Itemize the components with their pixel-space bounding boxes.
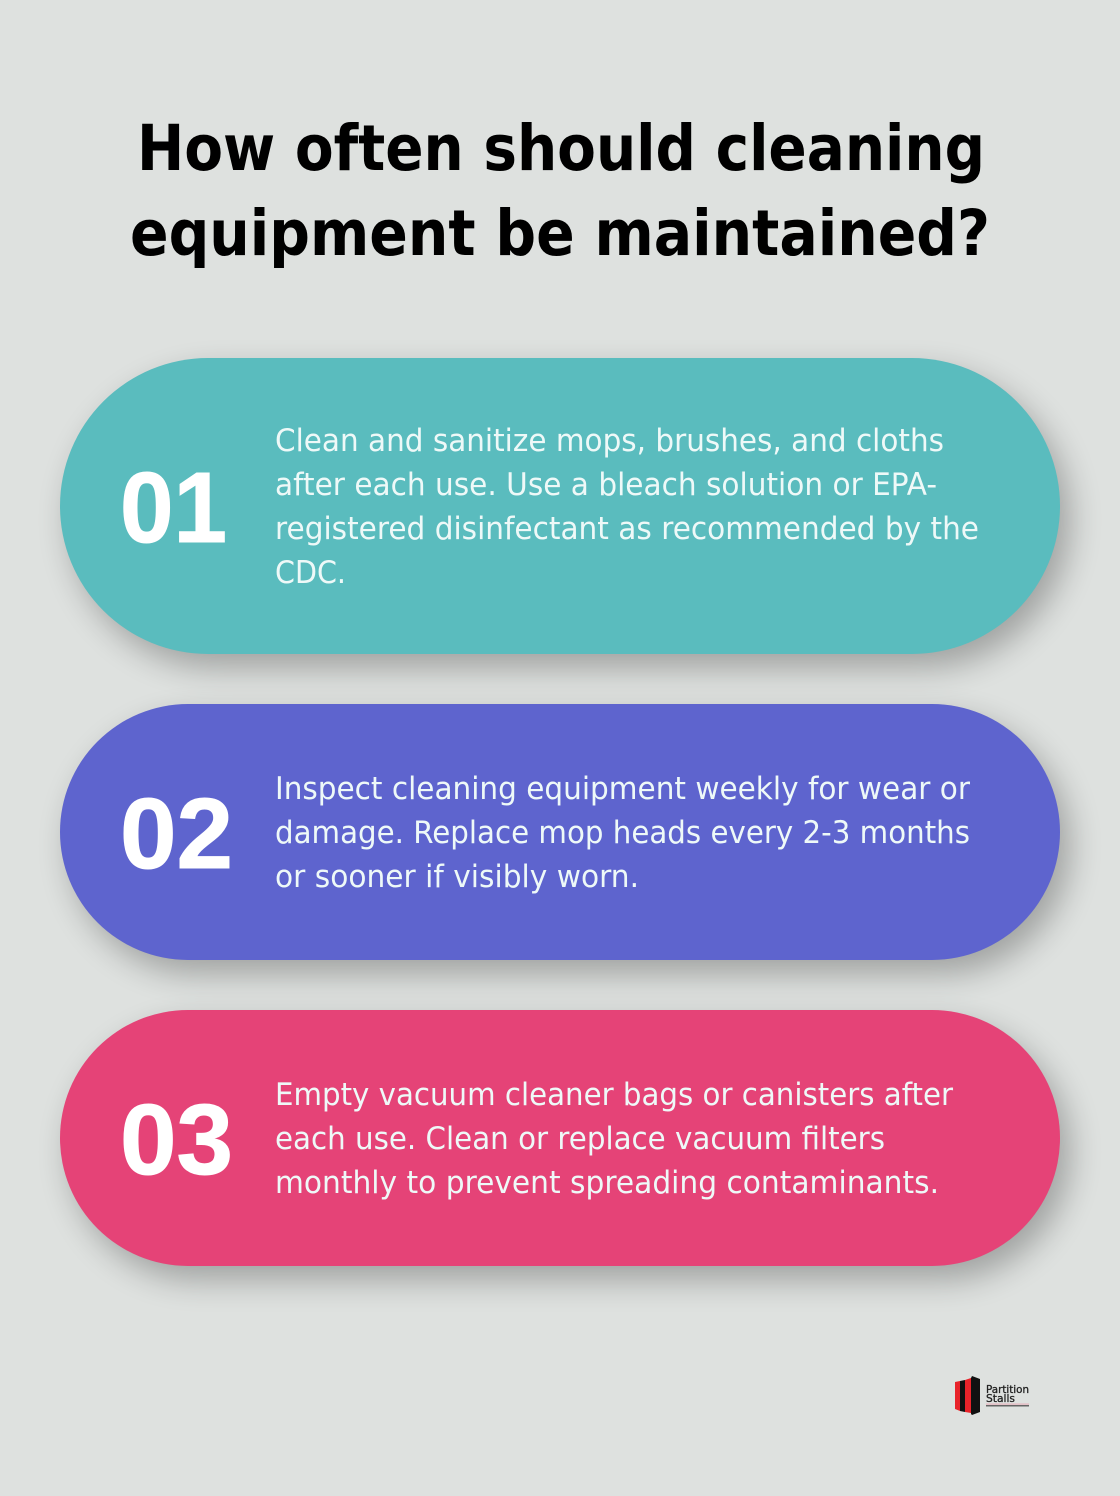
text: step 03 description: [275, 1077, 953, 1201]
text: step 03 description: Empty vacuum cleaner bags or canisters after: [275, 1077, 953, 1113]
text: step 01 description: CDC.: [275, 555, 346, 591]
number 02: 02: [120, 778, 233, 890]
panel: step 01: [60, 358, 1070, 668]
number 03: 03: [120, 1084, 233, 1196]
text: step 03 description: each use. Clean or replace vacuum filters: [275, 1121, 885, 1157]
logo wordmark: [986, 1384, 1029, 1406]
icon: partition panels: [955, 1376, 980, 1415]
logo wordmark: Partition: [986, 1384, 1029, 1396]
text: step 03 description: monthly to prevent spreading contaminants.: [275, 1165, 939, 1201]
title: How often should cleaning: [137, 112, 985, 185]
logo: Partition Stalls: [955, 1376, 1029, 1415]
title: equipment be maintained?: [130, 197, 990, 270]
text: step 02 description: [275, 771, 970, 895]
number 01: 01: [120, 452, 227, 564]
text: step 02 description: damage. Replace mop heads every 2-3 months: [275, 815, 970, 851]
panel: step 03: [60, 1010, 1070, 1280]
text: step 02 description: Inspect cleaning equipment weekly for wear or: [275, 771, 970, 807]
panel: step 02: [60, 704, 1070, 974]
title: [130, 112, 990, 270]
text: step 02 description: or sooner if visibly worn.: [275, 859, 639, 895]
logo wordmark: Stalls: [986, 1393, 1015, 1405]
text: step 01 description: [275, 423, 979, 591]
text: step 01 description: Clean and sanitize mops, brushes, and cloths: [275, 423, 944, 459]
text: step 01 description: registered disinfectant as recommended by the: [275, 511, 979, 547]
text: step 01 description: after each use. Use a bleach solution or EPA-: [275, 467, 937, 503]
